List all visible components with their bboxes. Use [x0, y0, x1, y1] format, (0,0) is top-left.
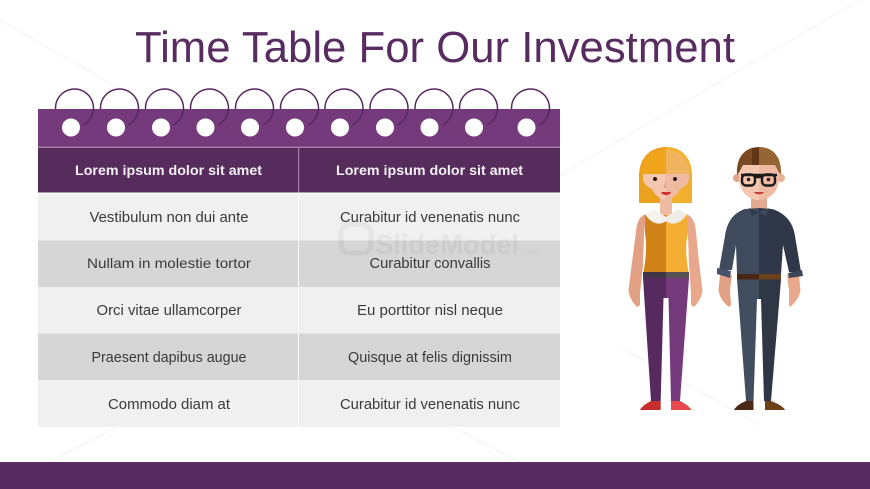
table rows: Eu porttitor nisl neque [357, 303, 503, 319]
shoes [640, 401, 661, 410]
collar [645, 209, 666, 224]
icon: man figure [717, 147, 803, 410]
trousers [737, 280, 759, 401]
waistband [643, 272, 666, 278]
icon: woman figure [628, 147, 702, 410]
face [739, 158, 759, 200]
belt [737, 274, 759, 280]
title: Time Table For Our Investment [135, 23, 735, 72]
neck [660, 195, 672, 215]
pants [643, 278, 666, 401]
table rows: Curabitur convallis [370, 256, 490, 272]
watermark [341, 224, 540, 260]
ears [733, 174, 741, 182]
calendar binding band [38, 109, 560, 147]
table header: Lorem ipsum dolor sit amet [75, 162, 262, 178]
table rows: Vestibulum non dui ante [90, 210, 248, 226]
table rows: Nullam in molestie tortor [87, 255, 251, 271]
table rows: Curabitur id venenatis nunc [340, 210, 520, 226]
table rows: Praesent dapibus augue [92, 350, 246, 366]
neck [751, 195, 767, 210]
table rows [38, 194, 560, 427]
table rows: Orci vitae ullamcorper [96, 303, 242, 319]
binding holes [62, 118, 536, 136]
face [643, 172, 666, 199]
table rows: Quisque at felis dignissim [348, 350, 512, 366]
shoes [734, 401, 754, 410]
hair [737, 147, 759, 175]
cuffs [717, 268, 731, 278]
sleeveless top [644, 215, 666, 272]
glasses [741, 174, 777, 186]
table header [38, 146, 560, 192]
spiral rings [55, 89, 549, 125]
watermark: SlideModel [375, 229, 519, 260]
watermark: .com [520, 246, 540, 256]
hair back [639, 147, 666, 203]
table header: Lorem ipsum dolor sit amet [336, 162, 523, 178]
hair fringe [642, 150, 666, 174]
arms [628, 214, 646, 307]
panel: timetable [38, 89, 560, 427]
shirt collar [749, 208, 759, 216]
table rows: Curabitur id venenatis nunc [340, 397, 520, 413]
shirt [719, 208, 759, 274]
footer bar [0, 462, 870, 489]
table rows: Commodo diam at [108, 397, 230, 413]
arms skin [718, 275, 732, 307]
